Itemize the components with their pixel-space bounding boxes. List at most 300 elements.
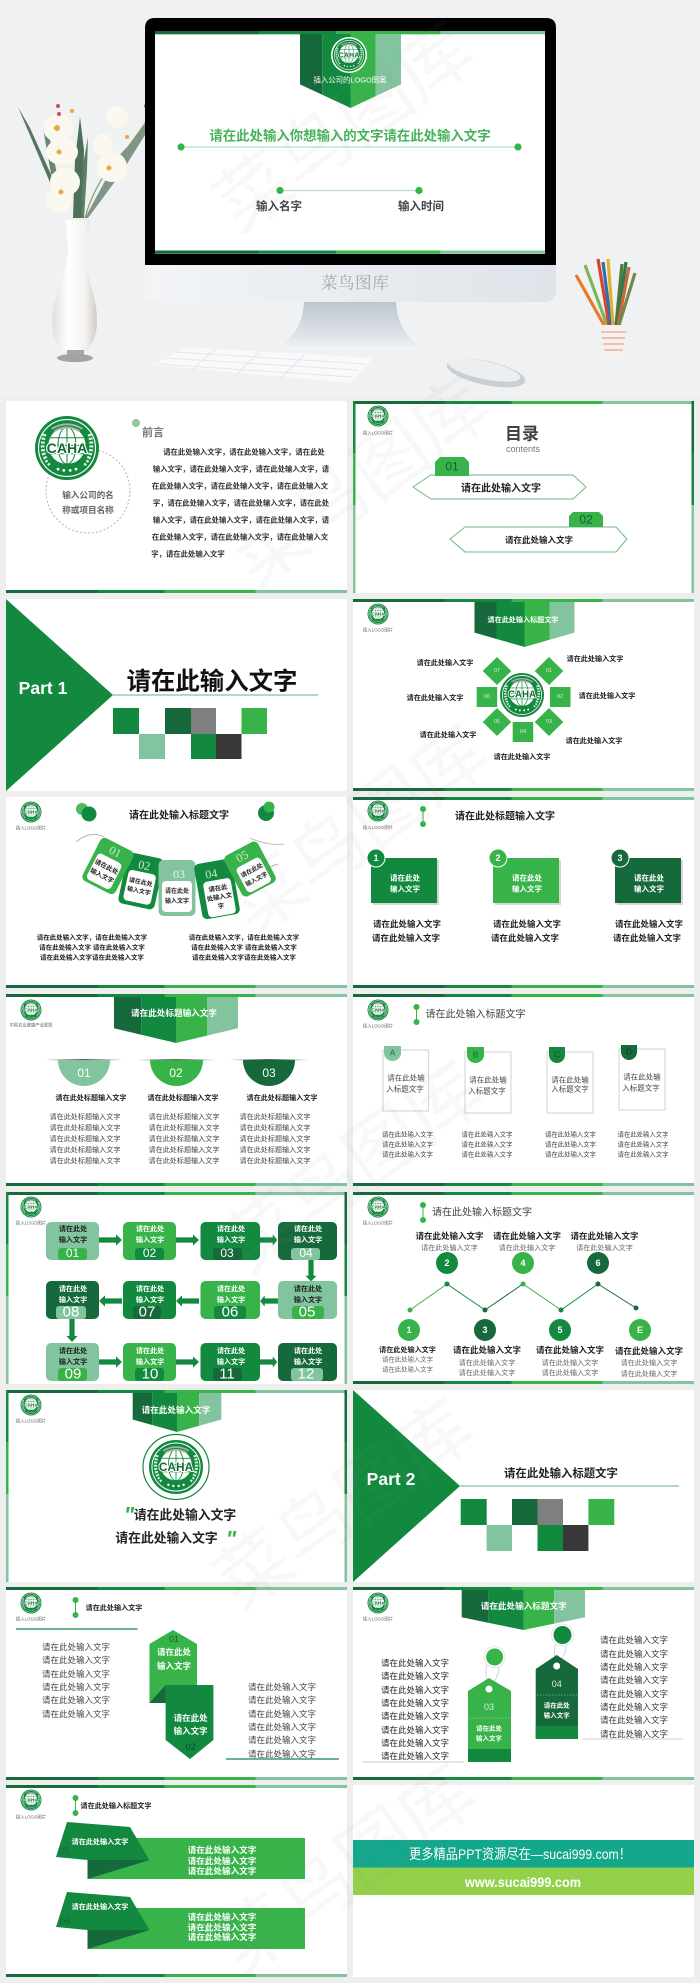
step 01: 输入文字: [59, 1235, 87, 1244]
panel: ribbons: [6, 1785, 347, 1977]
icon: pencils in cup: [576, 259, 635, 358]
right list: 请在此处输入文字: [248, 1695, 316, 1705]
step 12: 12: [298, 1366, 314, 1382]
note captions: 请在此处输入文字: [382, 1150, 433, 1158]
title marker: [420, 1202, 426, 1223]
tag 03: 03: [484, 1702, 494, 1712]
step 03: 输入文字: [217, 1235, 245, 1244]
card captions: 请在此处输入文字: [615, 919, 683, 929]
block 01: 01: [169, 1634, 179, 1644]
step 04: 输入文字: [294, 1235, 322, 1244]
quote text: [115, 1508, 236, 1546]
semicircle 01: [45, 1059, 123, 1086]
note B: B: [473, 1050, 478, 1060]
screen title: 请在此处输入你想输入的文字请在此处输入文字: [209, 128, 491, 144]
step 01: [46, 1222, 99, 1260]
tag 04: 处输入文: [206, 890, 233, 903]
panel: notes A-D: [353, 994, 694, 1186]
tag 04: 请在此: [208, 882, 229, 894]
panel: hexagon blocks: [6, 1587, 347, 1780]
logo caption: 插入LOGO图片: [16, 1220, 46, 1226]
paragraph: [151, 448, 330, 558]
tag 05: [222, 840, 278, 898]
step 05: [278, 1281, 337, 1320]
quote marks: [124, 1502, 237, 1552]
ribbon 05: 请在此处输入文字: [188, 1844, 257, 1855]
watermarks: 菜鸟图库: [204, 695, 506, 955]
right list: 请在此处输入文字: [600, 1702, 668, 1712]
step 05: 请在此处: [294, 1284, 322, 1293]
card 3: 请在此处: [634, 872, 664, 882]
step 08: [46, 1281, 99, 1320]
right list: 请在此处输入文字: [600, 1662, 668, 1672]
right list: 请在此处输入文字: [600, 1689, 668, 1699]
ribbon 06: 06: [59, 1916, 71, 1928]
semicircle 02: 02: [169, 1066, 183, 1080]
hero: desktop mockup: [0, 0, 700, 397]
panel: contents: [353, 401, 694, 593]
step 07: 输入文字: [136, 1295, 164, 1304]
note C: [547, 1047, 593, 1113]
card 2: [489, 849, 561, 905]
top circles: 2: [444, 1258, 450, 1268]
right text: 请在此处输入文字，请在此处输入文字: [189, 932, 300, 942]
radial labels: 请在此处输入文字: [420, 730, 476, 739]
banner: [462, 1590, 585, 1630]
presentation time: 输入时间: [398, 199, 444, 213]
heading: 请在此处输入标题文字: [426, 1008, 526, 1020]
heading: 请在此处输入标题文字: [129, 808, 229, 822]
logo caption: 插入LOGO图片: [16, 1418, 46, 1424]
item 01: 01: [445, 460, 459, 474]
column body text: 请在此处标题输入文字: [50, 1112, 120, 1121]
column body text: 请在此处标题输入文字: [50, 1156, 120, 1165]
bottom labels: 请在此处输入文字: [542, 1368, 598, 1377]
card 2: 2: [495, 853, 501, 863]
tag 02: 输入文字: [126, 884, 151, 897]
step 02: 请在此处: [136, 1224, 164, 1233]
ribbon 06: 请在此处输入文字: [72, 1902, 128, 1911]
left list: 请在此处输入文字: [42, 1695, 110, 1705]
ribbon 05: 请在此处输入文字: [188, 1865, 257, 1876]
note captions: [382, 1130, 669, 1158]
numbered tiles: 05: [494, 719, 500, 725]
logo: CAHA: [371, 1007, 385, 1013]
heading: 请在此处输入标题文字: [81, 1801, 151, 1810]
logo: CAHA: [24, 1007, 38, 1013]
note D: 入标题文字: [622, 1082, 660, 1092]
step 06: 06: [222, 1304, 238, 1320]
logo: CAHA: [24, 1204, 38, 1210]
paragraph: 字，请在此处输入文字: [151, 550, 225, 558]
step 12: 请在此处: [294, 1346, 322, 1355]
presenter name: 输入名字: [256, 199, 302, 213]
heading: 请在此处输入标题文字: [432, 1206, 532, 1218]
card captions: 请在此处输入文字: [372, 933, 440, 943]
panel: promo: [353, 1785, 694, 1977]
company name: 称或项目名称: [62, 504, 114, 515]
item 02: 02: [579, 512, 593, 526]
note captions: 请在此处输入文字: [545, 1130, 596, 1138]
step 05: 05: [299, 1304, 315, 1320]
step 10: 10: [142, 1366, 158, 1382]
step 11: 11: [219, 1366, 235, 1382]
bottom circles: 3: [482, 1325, 488, 1335]
logo caption: 插入LOGO图片: [363, 1022, 393, 1030]
teal band: 更多精品PPT资源尽在—sucai999.com！: [409, 1846, 631, 1862]
watermarks: 菜鸟图库: [206, 347, 508, 607]
banner: 请在此处输入标题文字: [488, 615, 558, 624]
card captions: 请在此处输入文字: [373, 919, 441, 929]
note captions: 请在此处输入文字: [461, 1150, 513, 1158]
title marker: [72, 1597, 78, 1618]
step 03: 请在此处: [217, 1224, 245, 1233]
step 12: 输入文字: [294, 1357, 322, 1366]
note A: 入标题文字: [386, 1084, 424, 1094]
right list: [226, 1682, 339, 1759]
note C: 入标题文字: [551, 1084, 589, 1094]
radial labels: 请在此处输入文字: [567, 654, 623, 663]
top circles: 6: [595, 1258, 601, 1268]
step 03: 03: [220, 1246, 234, 1260]
flow arrows: [66, 1234, 317, 1368]
company name: [62, 489, 114, 515]
left list: [362, 1658, 464, 1762]
tag 02: [117, 852, 165, 910]
screen banner with logo: [300, 34, 401, 108]
logo: [368, 1592, 388, 1614]
bottom labels: 请在此处输入文字: [615, 1346, 683, 1356]
radial labels: 请在此处输入文字: [566, 736, 622, 745]
note A: [383, 1046, 428, 1111]
bottom labels: 请在此处输入文字: [459, 1358, 515, 1367]
left list: 请在此处输入文字: [381, 1725, 449, 1735]
tag 05: 输入文字: [244, 870, 269, 888]
left list: 请在此处输入文字: [381, 1658, 449, 1668]
semicircle 02: [137, 1059, 215, 1086]
logo: [368, 406, 388, 426]
semicircle 01: 01: [77, 1066, 91, 1080]
step 04: 请在此处: [294, 1224, 322, 1233]
logo: CAHA: [371, 611, 385, 617]
logo: [20, 1790, 42, 1810]
note A: A: [390, 1048, 396, 1058]
quote marks: ": [226, 1526, 237, 1552]
logo: [20, 1196, 42, 1218]
note captions: 请在此处输入文字: [617, 1150, 669, 1158]
panel: quote: [6, 1390, 347, 1582]
triangle: [6, 599, 113, 791]
left list: 请在此处输入文字: [42, 1669, 110, 1679]
note captions: 请在此处输入文字: [545, 1150, 596, 1158]
monitor screen: [145, 18, 556, 265]
bottom labels: 请在此处输入文字: [621, 1369, 677, 1378]
step 09: 09: [65, 1366, 81, 1382]
tag 01: 输入文字: [89, 866, 116, 885]
panel: three columns: [6, 994, 347, 1186]
top labels: [415, 1231, 639, 1252]
central logo: CAHA: [508, 690, 536, 700]
card 3: 3: [617, 853, 623, 863]
bottom labels: 请在此处输入文字: [379, 1345, 436, 1354]
step 09: 输入文字: [59, 1357, 87, 1366]
left list: 请在此处输入文字: [381, 1711, 449, 1721]
logo: CAHA: [371, 413, 385, 419]
bottom labels: 请在此处输入文字: [459, 1368, 515, 1377]
column body text: 请在此处标题输入文字: [240, 1112, 310, 1121]
step 11: 输入文字: [217, 1357, 245, 1366]
banner: 请在此处输入文字: [142, 1404, 211, 1415]
ribbon 05: 05: [58, 1846, 70, 1858]
strings: [76, 834, 284, 872]
right list: 请在此处输入文字: [248, 1735, 316, 1745]
title marker: [72, 1795, 78, 1816]
paragraph: 请在此处输入文字，请在此处输入文字，请在此处: [163, 448, 325, 456]
logo caption: 插入LOGO图片: [363, 1220, 393, 1226]
card 3: 输入文字: [634, 884, 664, 894]
block 02: [150, 1685, 213, 1759]
top labels: 请在此处输入文字: [570, 1231, 639, 1241]
logo caption: 插入LOGO图片: [363, 824, 393, 831]
left list: 请在此处输入文字: [381, 1685, 449, 1695]
banner: 请在此处输入标题文字: [481, 1600, 567, 1611]
ribbon 05: [56, 1822, 305, 1879]
part label: Part 1: [19, 678, 68, 698]
step 09: [46, 1343, 99, 1382]
top labels: 请在此处输入文字: [493, 1231, 561, 1241]
left text: 请在此处输入文字 请在此处输入文字: [39, 942, 145, 952]
triangle: [353, 1390, 460, 1582]
tag 04: 输入文字: [544, 1710, 570, 1720]
column body text: 请在此处标题输入文字: [240, 1145, 310, 1154]
right list: 请在此处输入文字: [248, 1749, 316, 1759]
left list: 请在此处输入文字: [42, 1642, 110, 1652]
screen banner with logo: CAHA: [339, 50, 360, 60]
big logo: [143, 1434, 209, 1500]
tag 04: [536, 1624, 578, 1739]
card 2: 请在此处: [512, 872, 542, 882]
right list: 请在此处输入文字: [600, 1729, 668, 1739]
radial labels: 请在此处输入文字: [494, 752, 550, 761]
logo: [20, 802, 42, 822]
colour squares: [461, 1499, 614, 1551]
logo caption: 插入LOGO图片: [16, 1814, 46, 1820]
step 08: 输入文字: [59, 1295, 87, 1304]
screen banner with logo: 插入公司的LOGO图案: [313, 76, 387, 84]
tag 04: 请在此处: [544, 1700, 570, 1710]
heading: 目录: [505, 424, 539, 444]
left text: [37, 932, 148, 962]
tag 05: 请在此处: [239, 861, 264, 879]
column headings: 请在此处标题输入文字: [247, 1093, 317, 1102]
step 10: 请在此处: [136, 1346, 164, 1355]
step 07: 07: [139, 1304, 155, 1320]
card captions: 请在此处输入文字: [493, 919, 561, 929]
top labels: 请在此处输入文字: [421, 1243, 478, 1252]
semicircle 03: 03: [262, 1066, 276, 1080]
step 08: 08: [63, 1304, 79, 1320]
heading: 请在此处输入文字: [86, 1603, 142, 1612]
tag 04: 04: [552, 1679, 562, 1689]
step 01: 请在此处: [59, 1224, 87, 1233]
tag 05: 05: [233, 847, 251, 865]
colour squares: [113, 708, 267, 759]
monitor chin with watermark logo text: 菜鸟图库: [321, 274, 389, 292]
card 2: 输入文字: [512, 884, 542, 894]
dashed circle: [46, 449, 130, 533]
tag 02: 请在此处: [128, 876, 153, 888]
bottom circles: [398, 1319, 651, 1341]
right list: 请在此处输入文字: [248, 1709, 316, 1719]
radial labels: 请在此处输入文字: [407, 693, 463, 702]
ribbon 06: 请在此处输入文字: [188, 1922, 257, 1932]
top labels: 请在此处输入文字: [576, 1243, 633, 1252]
note captions: 请在此处输入文字: [382, 1130, 433, 1138]
note D: D: [626, 1048, 632, 1056]
paragraph: 在此处输入文字，请在此处输入文字，请在此处输入文: [152, 532, 329, 542]
logo: [20, 1000, 42, 1020]
ribbon 05: 请在此处输入文字: [188, 1855, 257, 1866]
bottom labels: 请在此处输入文字: [382, 1364, 433, 1374]
numbered tiles: 02: [557, 694, 563, 700]
left list: 请在此处输入文字: [42, 1709, 110, 1719]
note B: [465, 1047, 511, 1113]
logo: [20, 1592, 42, 1614]
column headings: [56, 1093, 317, 1102]
logo: CAHA: [371, 808, 385, 814]
tag 03: 输入文字: [476, 1734, 502, 1742]
panel: three cards: [353, 797, 694, 988]
step 04: 04: [299, 1246, 313, 1260]
bottom labels: 请在此处输入文字: [453, 1345, 521, 1355]
banner: [133, 1393, 221, 1432]
column body text: 请在此处标题输入文字: [50, 1123, 120, 1132]
tag 04: 04: [204, 866, 218, 882]
note D: [619, 1045, 665, 1110]
step 04: [278, 1222, 337, 1260]
card 1: [367, 849, 439, 905]
big logo: CAHA: [159, 1460, 194, 1474]
tag 03: [158, 860, 196, 916]
step 06: 请在此处: [217, 1284, 245, 1293]
monitor chin with watermark logo text: [145, 265, 556, 349]
note captions: 请在此处输入文字: [461, 1130, 513, 1138]
column body text: 请在此处标题输入文字: [240, 1134, 310, 1143]
note captions: 请在此处输入文字: [617, 1130, 669, 1138]
right list: 请在此处输入文字: [600, 1715, 668, 1725]
quote text: 请在此处输入文字: [134, 1508, 236, 1522]
ribbon 06: 请在此处输入文字: [188, 1931, 257, 1942]
logo: [368, 800, 388, 822]
banner: [474, 602, 574, 647]
block 01: 请在此处: [157, 1647, 191, 1657]
right list: 请在此处输入文字: [600, 1675, 668, 1685]
step 09: 请在此处: [59, 1346, 87, 1355]
zigzag line: [408, 1282, 638, 1312]
quote text: 请在此处输入文字: [115, 1530, 218, 1546]
right list: 请在此处输入文字: [248, 1722, 316, 1732]
tag 01: 01: [107, 843, 124, 861]
semicircle 03: [230, 1059, 308, 1086]
panel: part 1: [6, 599, 347, 791]
right list: 请在此处输入文字: [248, 1682, 316, 1692]
logo caption: 中国农业健康产业联盟: [10, 1022, 53, 1028]
logo: CAHA: [24, 1402, 38, 1408]
part label: Part 2: [367, 1469, 416, 1489]
subheading: contents: [506, 444, 541, 454]
step 07: 请在此处: [136, 1284, 164, 1293]
tag 03: [468, 1646, 511, 1762]
numbered tiles: [477, 657, 570, 742]
left list: 请在此处输入文字: [381, 1751, 449, 1761]
column headings: 请在此处标题输入文字: [148, 1093, 218, 1102]
step 10: 输入文字: [136, 1357, 164, 1366]
note captions: 请在此处输入文字: [461, 1140, 513, 1148]
logo: CAHA: [24, 809, 38, 815]
logo: [368, 1196, 388, 1218]
radial labels: 请在此处输入文字: [417, 658, 473, 667]
card 1: 请在此处: [390, 872, 420, 882]
column body text: 请在此处标题输入文字: [50, 1134, 120, 1143]
note C: 请在此处输: [551, 1074, 589, 1084]
step 07: [123, 1281, 176, 1320]
watermarks: [190, 0, 508, 1983]
left text: 请在此处输入文字，请在此处输入文字: [37, 932, 148, 942]
panel: zigzag timeline: [353, 1192, 694, 1384]
logo: CAHA: [371, 1600, 385, 1606]
logo: CAHA: [47, 440, 87, 456]
bottom labels: [379, 1345, 683, 1378]
logo caption: 插入LOGO图片: [363, 430, 393, 436]
tag 01: 请在此处: [93, 857, 121, 877]
step 08: 请在此处: [59, 1284, 87, 1293]
title: 请在此输入文字: [127, 668, 297, 696]
banner: [114, 997, 238, 1043]
logo: CAHA: [371, 1204, 385, 1210]
logo: CAHA: [24, 1600, 38, 1606]
ribbon 06: 请在此处输入文字: [188, 1911, 257, 1922]
ribbon 06: [56, 1892, 305, 1949]
lime band: www.sucai999.com: [464, 1874, 581, 1890]
tag 01: [81, 836, 135, 896]
step 05: 输入文字: [294, 1295, 322, 1304]
watermarks: 菜鸟图库: [199, 1033, 501, 1293]
card captions: 请在此处输入文字: [491, 933, 559, 943]
logo caption: 插入LOGO图片: [16, 824, 46, 832]
company name: 输入公司的名: [62, 489, 114, 500]
logo: [20, 1394, 42, 1416]
logo: CAHA: [24, 1797, 38, 1803]
logo caption: 插入LOGO图片: [16, 1616, 46, 1622]
block 02: 输入文字: [174, 1726, 208, 1736]
tag 03: 输入文字: [165, 897, 189, 905]
column body text: 请在此处标题输入文字: [149, 1123, 219, 1132]
column body text: 请在此处标题输入文字: [149, 1112, 219, 1121]
left list: 请在此处输入文字: [381, 1738, 449, 1748]
step 11: [200, 1343, 260, 1382]
step 12: [278, 1343, 337, 1382]
logo: [35, 416, 99, 480]
bottom labels: 请在此处输入文字: [621, 1358, 677, 1367]
right list: [583, 1635, 683, 1739]
step 03: [200, 1222, 260, 1260]
left text: 请在此处输入文字请在此处输入文字: [40, 952, 144, 962]
card 1: 输入文字: [390, 884, 420, 894]
logo caption: 插入LOGO图片: [363, 626, 393, 634]
note captions: 请在此处输入文字: [545, 1140, 596, 1148]
bottom labels: 请在此处输入文字: [542, 1358, 598, 1367]
logo: [368, 604, 388, 624]
